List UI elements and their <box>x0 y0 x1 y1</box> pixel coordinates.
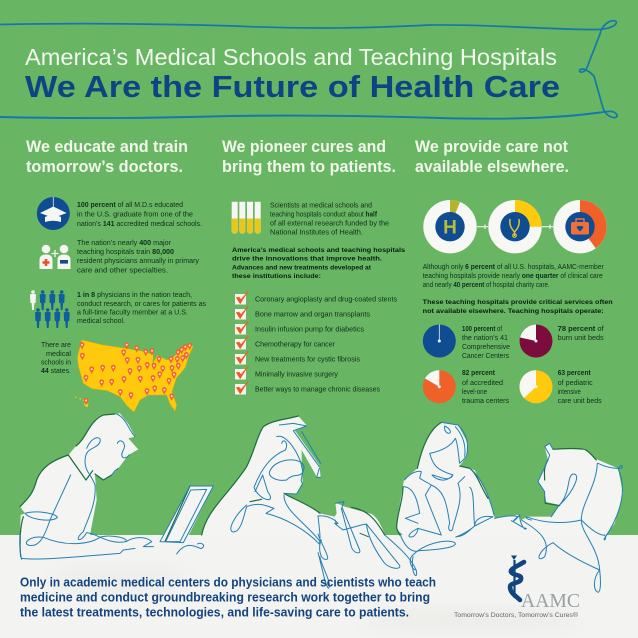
closing statement <box>20 576 436 620</box>
text: critical services: not available elsewhere. Teaching hospitals operate: <box>423 308 604 315</box>
text: innovations intro: America’s medical schools and teaching hospitals <box>232 247 405 254</box>
text: burn beds: burn unit beds <box>558 335 604 342</box>
text: 44 states: schools in <box>41 360 71 366</box>
text: pediatric beds: of pediatric <box>558 380 593 387</box>
text: innovations intro <box>232 247 405 280</box>
checklist: innovations: New treatments for cystic fibrosis <box>255 356 361 364</box>
text: 100 percent of M.D.s: nation’s 141 accredited medical schools. <box>77 221 202 228</box>
text: 6 percent paragraph: teaching hospitals provide nearly one quarter of clinical care <box>423 273 603 280</box>
text: innovations intro: drive the innovations that improve health. <box>232 256 382 262</box>
text: NIH research <box>270 202 389 236</box>
text: cancer centers <box>462 326 510 360</box>
pie: 100 percent cancer centers <box>423 324 456 358</box>
column heading: pioneer <box>222 138 396 176</box>
text: 6 percent paragraph: and nearly 40 percent of hospital charity care. <box>423 282 550 289</box>
arrow <box>477 224 488 229</box>
text: innovations intro: these institutions include: <box>232 273 321 280</box>
column heading: pioneer: bring them to patients. <box>222 158 396 176</box>
text: NIH research: of all external research funded by the <box>270 220 389 228</box>
text: 6 percent paragraph <box>423 264 604 289</box>
checklist: innovations: Minimally invasive surgery <box>255 372 339 378</box>
text: burn beds <box>558 326 604 342</box>
column heading: educate: tomorrow’s doctors. <box>26 158 183 176</box>
text: pediatric beds: 63 percent <box>558 370 591 377</box>
text: NIH research: Scientists at medical schools and <box>270 202 372 210</box>
pie: 63 percent pediatric beds <box>520 370 552 403</box>
text: trauma centers: trauma centers <box>462 398 510 405</box>
text: pediatric beds: care unit beds <box>558 398 602 405</box>
text: 44 states: There are <box>41 342 71 349</box>
text: 400 teaching hospitals: teaching hospitals train 80,000 <box>77 249 174 256</box>
icon: physicians 1 in 8 <box>30 290 70 328</box>
logo: AAMC <box>454 556 580 619</box>
text: cancer centers: Cancer Centers <box>462 353 510 360</box>
column heading: care <box>415 138 569 176</box>
logo: AAMC: Tomorrow’s Doctors, Tomorrow’s Cures® <box>454 611 578 619</box>
logo: AAMC: AAMC <box>521 590 580 612</box>
text: 400 teaching hospitals <box>77 240 200 274</box>
text: cancer centers: the nation’s 41 <box>462 335 508 342</box>
column heading: educate <box>26 138 188 176</box>
column heading: educate: We educate and train <box>26 138 188 156</box>
text: 400 teaching hospitals: resident physicians annually in primary <box>77 258 200 265</box>
column heading: care: We provide care not <box>415 138 568 156</box>
text: burn beds: 78 percent of <box>558 326 604 333</box>
donut: 40 percent charity care <box>553 200 607 253</box>
text: pediatric beds <box>558 370 602 405</box>
checklist: innovations: Chemotherapy for cancer <box>255 342 336 348</box>
icon: graduation cap <box>37 197 70 230</box>
checklist: innovations <box>235 292 398 394</box>
text: trauma centers <box>462 370 510 405</box>
illustration: scientist with pipette <box>202 416 417 588</box>
text: critical services <box>423 299 613 315</box>
text: 100 percent of M.D.s <box>77 202 202 228</box>
text: cancer centers: Comprehensive <box>462 344 510 351</box>
background: white lower band <box>0 535 638 638</box>
text: 1 in 8 physicians: medical school. <box>77 318 125 325</box>
column heading: pioneer: We pioneer cures and <box>222 138 386 156</box>
donut: 6 percent hospitals: H <box>443 218 457 238</box>
title <box>25 44 560 104</box>
checklist: innovations: Bone marrow and organ transplants <box>255 312 371 318</box>
text: 100 percent of M.D.s: 100 percent of all M.D.s educated <box>77 202 183 209</box>
icon: doctors <box>40 245 70 269</box>
pie: 82 percent trauma centers <box>423 370 456 403</box>
checklist: innovations: Coronary angioplasty and drug-coated stents <box>255 296 398 304</box>
text: 1 in 8 physicians <box>77 292 207 325</box>
text: 44 states: medical <box>46 351 71 358</box>
checklist: innovations: Better ways to manage chronic diseases <box>255 386 381 394</box>
text: 6 percent paragraph: Although only 6 percent of all U.S. hospitals, AAMC-member <box>423 264 604 271</box>
arrow <box>542 224 553 229</box>
text: innovations intro: Advances and new treatments developed at <box>232 264 372 272</box>
donut: one quarter clinical care <box>488 200 542 253</box>
header ribbon <box>0 21 617 119</box>
text: trauma centers: 82 percent <box>462 370 496 377</box>
illustration: man in profile <box>495 443 623 592</box>
text: 44 states: 44 states. <box>41 368 71 375</box>
map: United States <box>75 340 193 412</box>
text: NIH research: National Institutes of Health. <box>270 230 363 236</box>
illustration: student at laptop <box>20 413 213 559</box>
text: 400 teaching hospitals: The nation’s nearly 400 major <box>77 240 172 247</box>
text: 1 in 8 physicians: 1 in 8 physicians in the nation teach, <box>77 292 192 299</box>
closing statement: medicine and conduct groundbreaking research work together to bring <box>20 590 430 604</box>
text: 1 in 8 physicians: a full-time faculty member at a U.S. <box>77 310 188 316</box>
checklist: innovations: Insulin infusion pump for diabetics <box>255 326 365 334</box>
text: pediatric beds: intensive <box>558 389 581 396</box>
icon: test tubes <box>232 202 261 234</box>
illustration: woman in jacket <box>397 422 496 570</box>
closing statement: Only in academic medical centers do physicians and scientists who teach <box>20 576 436 590</box>
column heading: care: available elsewhere. <box>415 158 569 176</box>
title: We Are the Future of Health Care <box>25 69 560 104</box>
text: 44 states <box>41 342 71 375</box>
title: America’s Medical Schools and Teaching Hospitals <box>25 44 557 70</box>
closing statement: the latest treatments, technologies, and life-saving care to patients. <box>20 606 409 620</box>
text: trauma centers: of accredited <box>462 380 503 387</box>
text: 1 in 8 physicians: conduct research, or cares for patients as <box>77 301 207 308</box>
text: critical services: These teaching hospitals provide critical services often <box>423 299 613 306</box>
text: 400 teaching hospitals: care and other specialties. <box>77 268 168 274</box>
text: NIH research: teaching hospitals conduct about half <box>270 212 378 218</box>
text: 100 percent of M.D.s: in the U.S. graduate from one of the <box>77 212 193 218</box>
text: trauma centers: level-one <box>462 389 487 396</box>
text: cancer centers: 100 percent of <box>462 326 502 333</box>
pie: 78 percent burn beds <box>520 324 552 358</box>
donut: 6 percent hospitals <box>423 200 477 253</box>
